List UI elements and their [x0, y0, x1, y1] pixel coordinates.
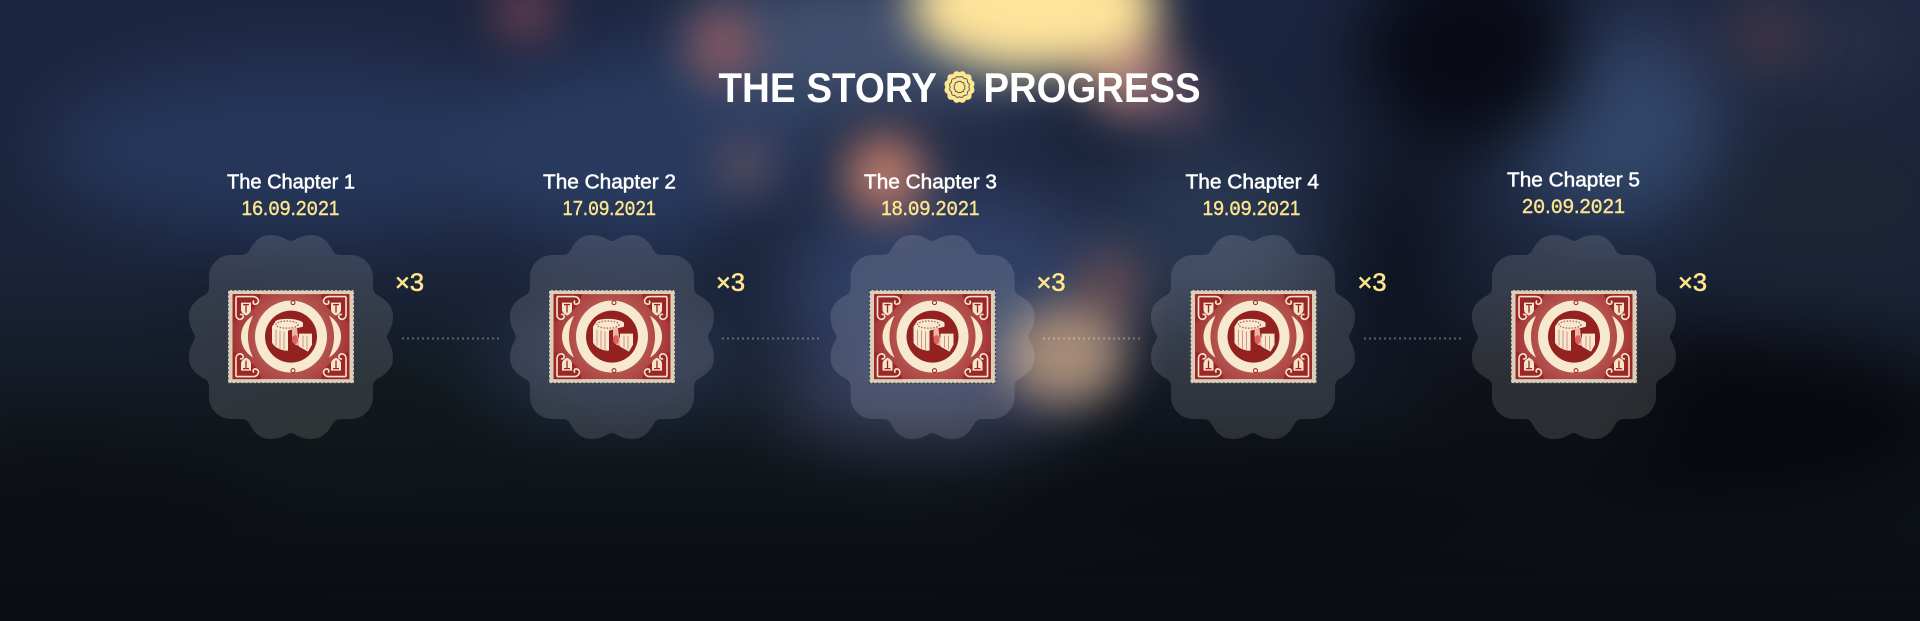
chapter 1 flower badge	[189, 235, 393, 439]
chapter 3	[830, 172, 1066, 439]
chapter 3 heading: The Chapter 3	[864, 172, 997, 194]
chapter 1 multiplier: ×3	[395, 269, 424, 297]
connector 1-2	[402, 338, 501, 340]
chapter 5	[1472, 170, 1707, 439]
chapter 4 heading: The Chapter 4	[1186, 172, 1319, 194]
chapter 1 stamp	[228, 290, 354, 383]
chapter 2 date: 17.09.2021	[562, 198, 656, 222]
chapter 3 multiplier: ×3	[1036, 269, 1066, 297]
chapter 4 flower badge	[1151, 235, 1355, 439]
title: PROGRESS	[984, 64, 1200, 111]
chapter 2 stamp	[549, 290, 675, 383]
chapter 2	[510, 172, 745, 439]
chapter 3 stamp	[870, 290, 996, 383]
chapter 2 flower badge	[510, 235, 714, 439]
chapter 4 stamp	[1190, 290, 1316, 383]
chapter 2 heading: The Chapter 2	[543, 172, 676, 194]
chapter 3 flower badge	[830, 235, 1034, 439]
chapter 4 multiplier: ×3	[1358, 269, 1386, 297]
connector 2-3	[722, 338, 821, 340]
chapter 5 date: 20.09.2021	[1522, 196, 1625, 220]
title	[718, 64, 1200, 111]
chapter 1 heading: The Chapter 1	[227, 172, 355, 194]
connector 4-5	[1364, 338, 1463, 340]
chapter 5 heading: The Chapter 5	[1507, 170, 1640, 192]
chapter 5 stamp	[1511, 290, 1637, 383]
title: THE STORY	[718, 64, 937, 111]
chapter 1 date: 16.09.2021	[242, 198, 340, 222]
chapter 5 multiplier: ×3	[1678, 269, 1707, 297]
connector 3-4	[1043, 338, 1142, 340]
chapter 1	[189, 172, 424, 439]
icon: title flower	[945, 71, 974, 103]
chapter 3 date: 18.09.2021	[881, 198, 980, 222]
chapter 2 multiplier: ×3	[716, 269, 745, 297]
chapter 4	[1151, 172, 1386, 439]
chapter 4 date: 19.09.2021	[1202, 198, 1300, 222]
chapter 5 flower badge	[1472, 235, 1676, 439]
